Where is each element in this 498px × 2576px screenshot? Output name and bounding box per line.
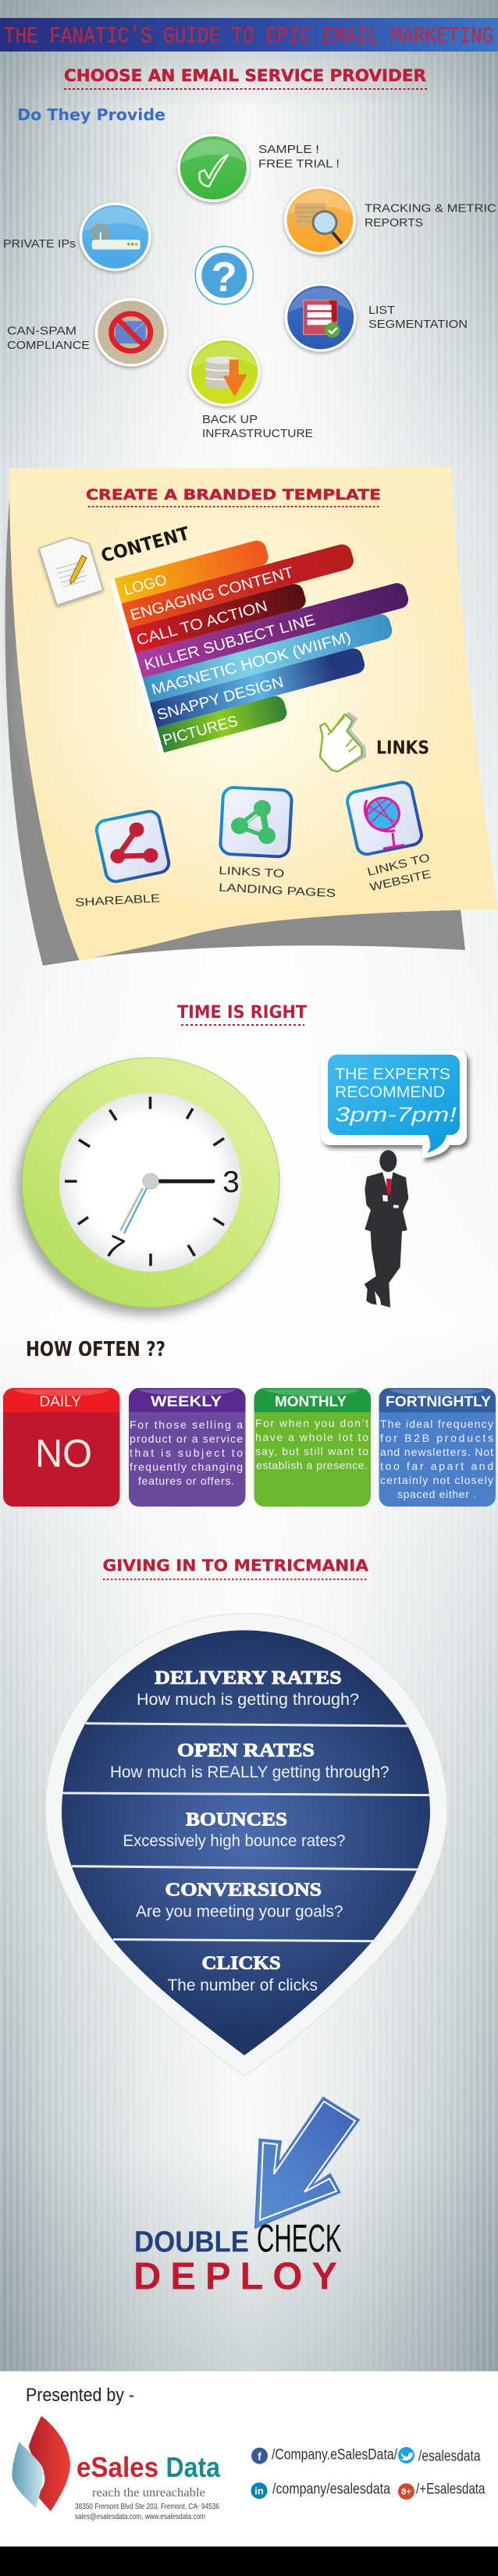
label: backup infrastructure: BACK UP [202,413,258,426]
social: twitter: /esalesdata [418,2448,481,2464]
panel: fortnightly: too far apart and [380,1460,493,1472]
metric: clicks: The number of clicks [167,1976,318,1994]
icon: document and pencil [39,538,103,605]
label: tracking and metric reports: TRACKING & METRIC [365,202,496,215]
social: facebook: f [258,2450,261,2462]
panel: fortnightly: for B2B products [380,1432,493,1444]
heading: choose an email service provider: CHOOSE AN EMAIL SERVICE PROVIDER [64,66,426,85]
logo wordmark: eSales [76,2451,158,2483]
ribbon: logo [114,539,270,603]
ribbon: call to action: CALL TO ACTION [135,598,269,649]
panel: weekly: WEEKLY [151,1393,222,1410]
logo wordmark: reach the unreachable [92,2486,205,2500]
social: google plus: 8+ [401,2488,411,2497]
clock numeral 7: 7 [99,1229,129,1267]
text: double check deploy: CHECK [257,2216,342,2260]
speech bubble: RECOMMEND [335,1084,445,1101]
label: backup infrastructure [202,413,313,440]
social: twitter [398,2447,481,2464]
label: list segmentation [368,304,468,331]
bottom black bar [0,2546,498,2576]
heading: time is right: TIME IS RIGHT [177,1003,307,1023]
panel: fortnightly [379,1388,496,1507]
panel: weekly: features or offers. [138,1475,234,1487]
metric: conversions: CONVERSIONS [165,1880,322,1901]
footer panel [0,2371,498,2547]
label: links to landing pages [219,865,336,900]
list of content ribbons [110,507,432,754]
logo wordmark: sales@esalesdata.com, www.esalesdata.com [75,2512,205,2521]
ribbon: killer subject line [136,581,411,678]
note paper [9,467,498,961]
businessman silhouette [365,1150,408,1308]
label: sample free trial: SAMPLE ! [258,143,319,156]
metric: clicks: CLICKS [201,1953,281,1973]
panel: daily: DAILY [39,1393,81,1410]
label: list segmentation: SEGMENTATION [368,318,468,331]
note shadow [5,500,465,966]
panel: fortnightly: spaced either . [397,1488,476,1500]
ribbon: magnetic hook: MAGNETIC HOOK (WIIFM) [150,628,353,699]
label: tracking and metric reports [365,202,496,229]
panel: weekly: frequently changing [130,1461,243,1473]
arrow: pointing at double check [255,2097,359,2228]
clock [22,1058,279,1308]
label: tracking and metric reports: REPORTS [365,216,423,229]
label: can-spam compliance: CAN-SPAM [7,325,76,338]
metric: open rates: How much is REALLY getting through? [110,1763,389,1781]
icon: backup infrastructure [189,338,261,407]
icon tile: landing pages [220,787,292,857]
icon tile: website globe [346,781,423,856]
label: links to website: LINKS TO [366,852,432,879]
ribbon: killer subject line: KILLER SUBJECT LINE [143,612,317,674]
label: content: CONTENT [98,522,192,567]
presented by: Presented by - [26,2385,134,2406]
label: sample free trial [258,143,340,170]
heading: how often: HOW OFTEN ?? [26,1338,165,1361]
social: linkedin: /company/esalesdata [272,2481,390,2497]
text: double check deploy: DEPLOY [133,2255,337,2297]
metric: delivery rates [137,1668,359,1709]
icon: pointing hand cursor [320,712,366,771]
icon: question mark: ? [212,254,237,301]
subheading: do they provide: Do They Provide [17,105,165,124]
speech bubble: THE EXPERTS [335,1066,450,1083]
ribbon: call to action [129,582,308,653]
ribbon: engaging content [122,543,356,628]
icon: private IPs router [80,202,151,271]
metric: conversions: Are you meeting your goals? [136,1902,343,1920]
icon: can-spam compliance [95,298,167,367]
metric: delivery rates: How much is getting through? [137,1691,359,1709]
metric: bounces: Excessively high bounce rates? [123,1832,345,1850]
text: double check deploy: DOUBLE [134,2226,249,2258]
ribbon: logo: LOGO [122,571,169,599]
panel: weekly [129,1388,245,1507]
icon tile: shareable [94,809,171,884]
heading: create a branded template: CREATE A BRANDED TEMPLATE [86,487,381,503]
social: linkedin [251,2481,390,2499]
label: shareable: SHAREABLE [75,893,161,909]
ribbon: engaging content: ENGAGING CONTENT [128,564,296,624]
social: google plus [398,2481,486,2500]
speech bubble [321,1050,467,1158]
panel: monthly [254,1388,371,1507]
speech bubble: 3pm-7pm! [335,1103,457,1126]
metric: clicks [167,1953,318,1994]
ribbon: pictures [157,694,289,753]
label: backup infrastructure: INFRASTRUCTURE [202,427,313,440]
logo wordmark: Data [165,2451,221,2483]
panel: daily: NO [35,1432,92,1475]
clock numeral 3: 3 [222,1165,240,1199]
label: links to landing pages: LANDING PAGES [219,882,336,900]
metric: bounces: BOUNCES [186,1809,287,1830]
panel: monthly: have a whole lot to [255,1431,368,1443]
metrics funnel drop [45,1614,447,2076]
metric: conversions [136,1880,343,1920]
label: private IPs: PRIVATE IPs [3,237,76,251]
heading: giving in to metricmania: GIVING IN TO METRICMANIA [103,1557,369,1575]
text: double check deploy [133,2216,342,2297]
icon: tracking and metric reports [284,186,356,254]
ribbon: magnetic hook [143,612,394,703]
panel: monthly: establish a presence. [256,1459,368,1471]
note contents [39,487,432,909]
label: list segmentation: LIST [368,304,395,317]
panel: monthly: MONTHLY [275,1393,347,1410]
ribbon: snappy design: SNAPPY DESIGN [155,674,286,724]
clock hands [120,1173,213,1233]
panel: fortnightly: The ideal frequency [380,1418,493,1430]
metric: open rates [110,1741,389,1781]
label: links to landing pages: LINKS TO [219,865,285,881]
panel: weekly: that is subject to [130,1446,243,1459]
metric: open rates: OPEN RATES [177,1741,315,1761]
metric: bounces [123,1809,345,1850]
label: can-spam compliance: COMPLIANCE [7,339,90,352]
ribbon: pictures: PICTURES [161,713,240,749]
panel: weekly: product or a service [130,1432,243,1445]
panel: fortnightly: FORTNIGHTLY [386,1393,492,1410]
label: links to website [366,852,432,894]
logo wordmark: 38350 Fremont Blvd Ste 203, Fremont, CA- 94536 [75,2502,219,2511]
label: can-spam compliance [7,325,90,352]
panel: branded template sticky note [5,467,498,966]
label: links to website: WEBSITE [368,868,432,894]
social: facebook: /Company.eSalesData/ [272,2447,398,2464]
icon: question mark [195,247,253,304]
icon: sample free trial [177,133,249,202]
panel: weekly: For those selling a [130,1418,243,1431]
panel: monthly: say, but still want to [255,1445,368,1457]
social: linkedin: in [254,2485,264,2497]
panel: fortnightly: and newsletters. Not [380,1446,493,1458]
icon: list segmentation [285,283,357,352]
metric: delivery rates: DELIVERY RATES [155,1668,342,1688]
label: sample free trial: FREE TRIAL ! [258,157,340,170]
logo mark [12,2416,70,2511]
panel: monthly: For when you don’t [255,1417,368,1429]
panel: fortnightly: certainly not closely [380,1474,493,1486]
logo wordmark [75,2451,221,2521]
ribbon: snappy design [150,646,367,728]
panel: daily [3,1388,120,1507]
label: links: LINKS [376,737,429,759]
